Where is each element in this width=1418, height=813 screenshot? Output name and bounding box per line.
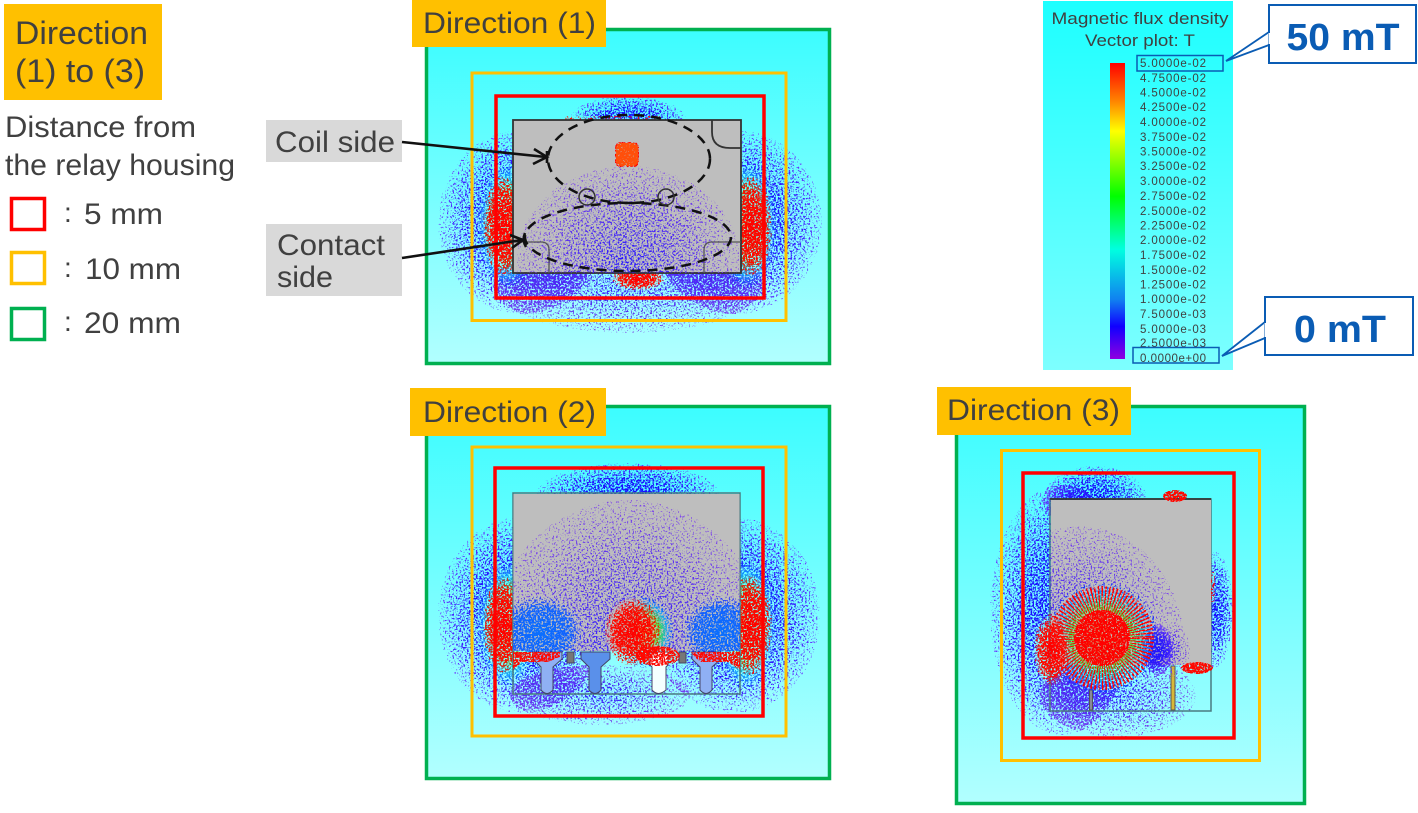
coloured fringe around side clusters — [478, 164, 776, 288]
scale labels: 1.5000e-02 — [1140, 265, 1206, 277]
tag: direction 3: Direction (3) — [947, 394, 1120, 427]
red clusters at corners — [1163, 490, 1215, 674]
arrow: coil side — [402, 142, 547, 164]
relay housing body — [1051, 500, 1211, 665]
blue lobe toward the pin — [1126, 622, 1190, 678]
panel: legend — [4, 4, 235, 340]
scale labels: 2.5000e-02 — [1140, 206, 1206, 218]
coloured body of the radial sphere — [1046, 582, 1158, 694]
dashed ellipse: coil side — [548, 115, 710, 203]
purple dome of vectors — [513, 500, 740, 651]
scale labels: 5.0000e-03 — [1140, 324, 1206, 336]
strong field clusters at the sides — [483, 575, 772, 675]
scale labels: 1.0000e-02 — [1140, 294, 1206, 306]
5 mm and 10 mm frames — [472, 73, 786, 320]
scale labels: 4.5000e-02 — [1140, 88, 1206, 100]
5 mm and 10 mm frames — [1002, 450, 1260, 760]
scale labels: 7.5000e-03 — [1140, 309, 1206, 321]
tag: direction 1: Direction (1) — [423, 7, 596, 40]
field background with green 20 mm frame — [956, 406, 1304, 804]
field background with green 20 mm frame — [426, 406, 830, 778]
scale labels: 4.0000e-02 — [1140, 117, 1206, 129]
callout: 0 mT: 0 mT — [1294, 309, 1386, 351]
scale labels: 3.7500e-02 — [1140, 132, 1206, 144]
scale labels: 1.2500e-02 — [1140, 280, 1206, 292]
small coil terminals — [579, 189, 674, 205]
label: contact side — [266, 224, 402, 296]
contact terminals and pins — [533, 652, 721, 694]
relay housing outline — [513, 493, 740, 694]
contact pins — [1090, 666, 1175, 710]
scale labels: 3.2500e-02 — [1140, 161, 1206, 173]
highlight box: zero label — [1133, 348, 1219, 363]
scale labels — [1140, 58, 1206, 365]
panel: direction 2 simulation — [410, 388, 830, 790]
legend item: 10 mm: : — [64, 252, 72, 283]
strong field clusters at the sides and bottom — [483, 116, 772, 290]
panel: direction 1 simulation — [412, 0, 830, 364]
inner flux vectors in contact side — [516, 166, 740, 273]
inner flux vectors — [513, 500, 740, 651]
red crescent left of the sphere — [1034, 614, 1070, 686]
scale labels: 0.0000e+00 — [1140, 353, 1206, 365]
outer flux vectors — [438, 463, 820, 725]
dashed ellipse: contact side — [525, 203, 731, 271]
blue patches — [513, 596, 740, 651]
scale background — [1043, 1, 1233, 370]
callout: 0 mT — [1222, 297, 1413, 356]
legend item: 10 mm: 10 mm — [85, 253, 181, 286]
scale labels: 3.5000e-02 — [1140, 146, 1206, 158]
text: distance from the relay housing: Distance from — [5, 111, 196, 144]
legend item: 20 mm — [12, 306, 181, 340]
legend item: 5 mm: : — [64, 197, 72, 228]
strong field cluster at contact — [513, 598, 740, 670]
relay housing body — [514, 494, 740, 651]
callout: 50 mT: 50 mT — [1286, 17, 1400, 59]
arrow: contact side — [402, 233, 526, 258]
field background with green 20 mm frame — [426, 30, 830, 364]
coloured fringe around side clusters — [478, 561, 776, 689]
label: coil side — [266, 120, 402, 162]
inner flux vectors — [1050, 526, 1184, 665]
heading: direction 1 to 3: Direction — [15, 15, 148, 51]
scale labels: 4.7500e-02 — [1140, 73, 1206, 85]
scale labels: 2.2500e-02 — [1140, 220, 1206, 232]
scale title: Vector plot: T — [1085, 31, 1195, 50]
relay housing — [513, 120, 741, 273]
panel: colour scale — [1043, 1, 1233, 370]
dark housing top edge — [1050, 498, 1211, 500]
relay housing outline — [1050, 499, 1211, 711]
purple halo of vectors — [1050, 526, 1184, 665]
scale labels: 5.0000e-02 — [1140, 58, 1206, 70]
panel: direction 3 simulation — [937, 387, 1304, 804]
tag: direction 2: Direction (2) — [423, 396, 596, 429]
label: contact side: Contact — [277, 229, 386, 262]
scale labels: 4.2500e-02 — [1140, 102, 1206, 114]
scale labels: 1.7500e-02 — [1140, 250, 1206, 262]
legend item: 20 mm: 20 mm — [84, 307, 181, 340]
scale labels: 2.5000e-03 — [1140, 338, 1206, 350]
text: distance from the relay housing — [5, 111, 235, 182]
housing internal outlines — [513, 120, 741, 273]
tag: direction 2 — [410, 388, 606, 436]
coloured halo of the contact cluster — [610, 596, 674, 668]
legend item: 10 mm — [12, 252, 181, 286]
heading: direction 1 to 3 — [4, 4, 162, 100]
strong field cluster at coil — [615, 142, 639, 167]
scale title: Magnetic flux density — [1052, 9, 1229, 28]
scale title — [1052, 9, 1229, 50]
5 mm and 10 mm frames — [472, 447, 786, 736]
label: coil side: Coil side — [275, 126, 395, 159]
tag: direction 3 — [937, 387, 1131, 435]
tag: direction 1 — [412, 0, 606, 47]
legend item: 20 mm: : — [64, 306, 72, 337]
legend item: 5 mm — [12, 197, 163, 231]
colour bar — [1110, 63, 1125, 359]
highlight box: maximum label — [1137, 56, 1223, 71]
heading: direction 1 to 3: (1) to (3) — [15, 53, 145, 89]
scale labels: 2.0000e-02 — [1140, 235, 1206, 247]
text: distance from the relay housing: the relay housing — [5, 149, 235, 182]
outer flux vectors — [438, 96, 822, 333]
scale labels: 2.7500e-02 — [1140, 191, 1206, 203]
legend item: 5 mm: 5 mm — [84, 198, 163, 231]
callout: 50 mT — [1226, 5, 1416, 63]
radial red spokes in the sphere — [1076, 612, 1128, 664]
outer flux vectors — [990, 466, 1233, 737]
scale labels: 3.0000e-02 — [1140, 176, 1206, 188]
label: contact side: side — [277, 261, 333, 294]
